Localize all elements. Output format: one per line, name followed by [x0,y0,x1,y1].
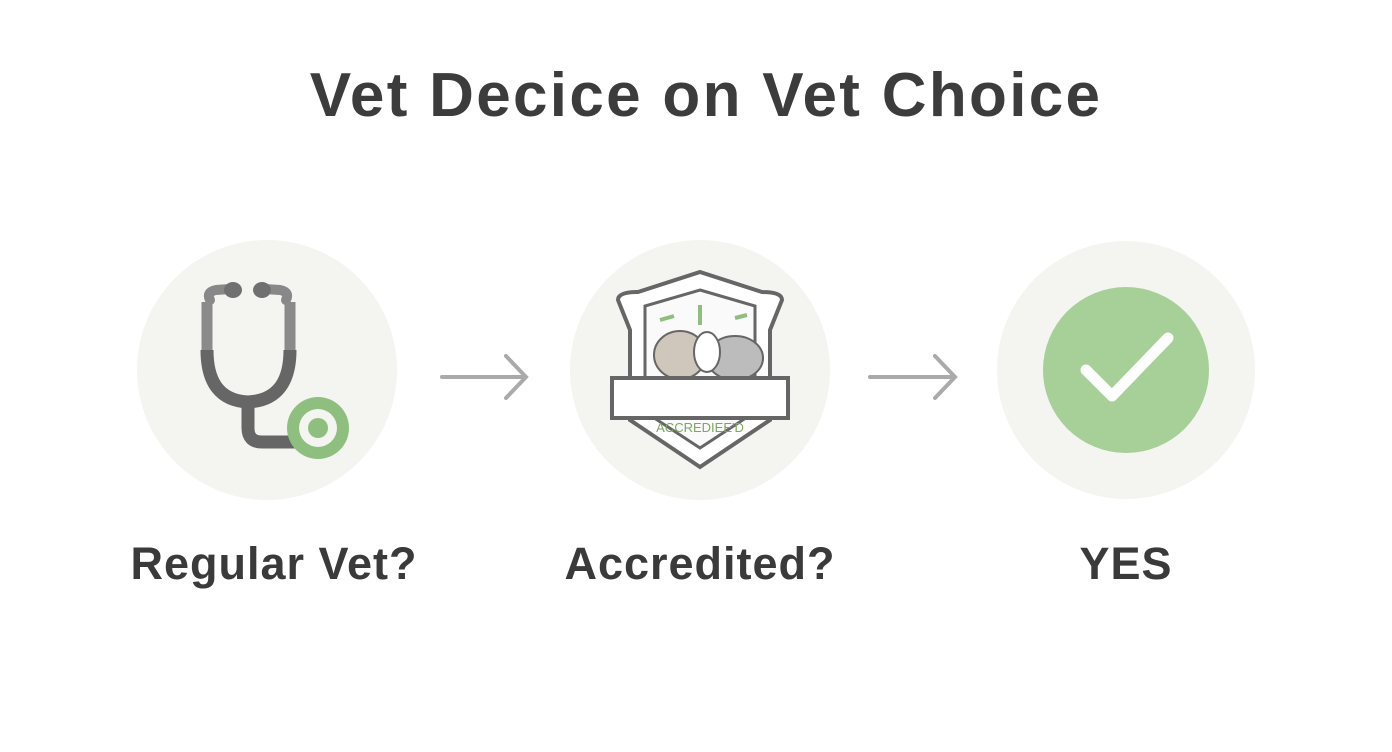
step 2 circle: accredited shield [570,240,830,500]
label 1: Regular Vet? [130,538,418,589]
step 3 circle: check [997,241,1255,499]
step 2 circle: accredited shield: ACCREDIEE'D [656,420,744,435]
label 3: YES [1079,538,1173,589]
arrow 2 [870,356,955,398]
arrow 1 [442,356,526,398]
step 1 circle: stethoscope [137,240,397,500]
label 2: Accredited? [564,538,836,589]
title: Vet Decice on Vet Choice [310,61,1102,130]
